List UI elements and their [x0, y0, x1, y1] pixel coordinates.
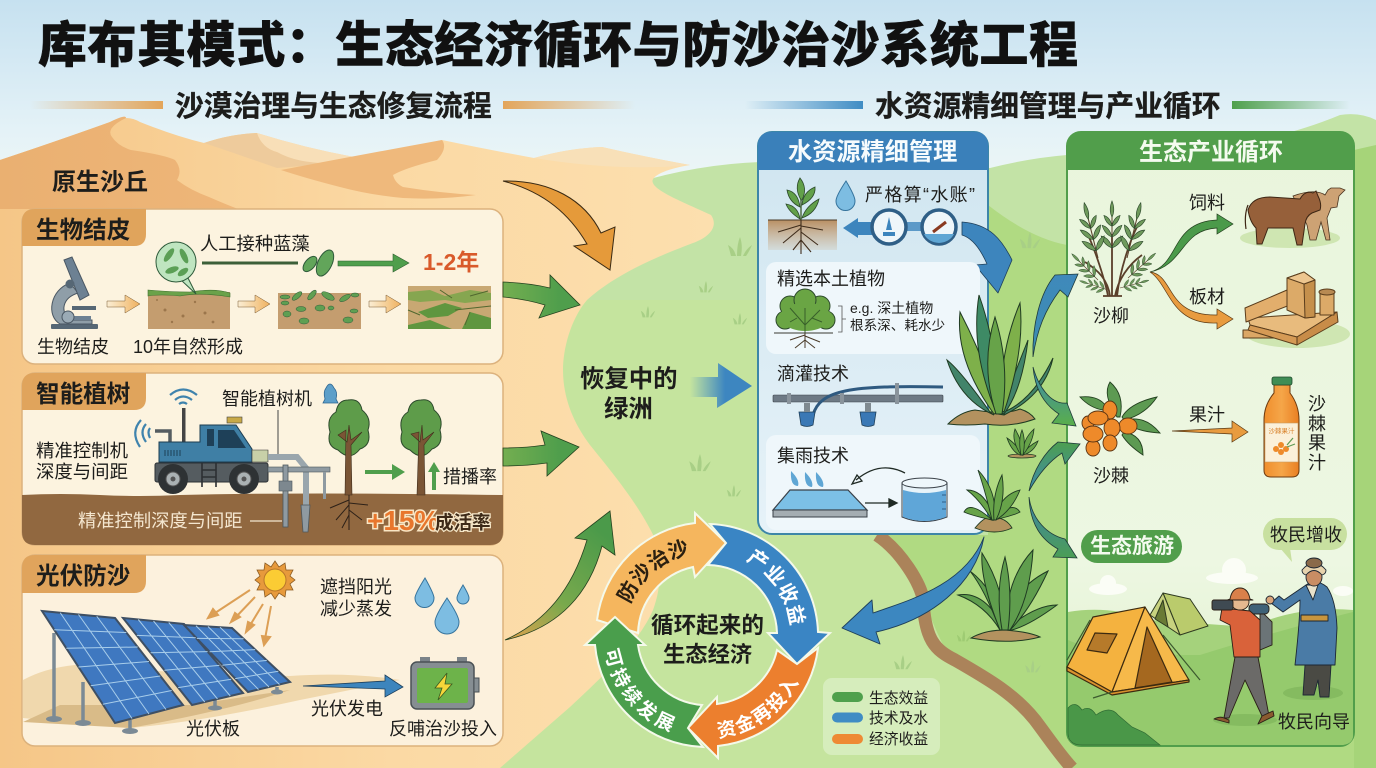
title: 库布其模式：生态经济循环与防沙治沙系统工程 [38, 19, 1078, 73]
icon: seedling with roots [768, 178, 837, 254]
label: 果汁 [1189, 405, 1225, 425]
label: 反哺治沙投入 [389, 719, 497, 739]
icon: sun [255, 561, 295, 599]
vertical label: sea buckthorn juice [1308, 394, 1326, 473]
label: 板材 [1189, 287, 1225, 307]
arrow: feed [1150, 214, 1233, 272]
header title: 水资源精细管理 [788, 139, 957, 166]
panel: smart tree planting [22, 373, 503, 545]
large tent [1067, 607, 1200, 698]
text: shade: 减少蒸发 [320, 599, 392, 619]
section heading: desert [30, 91, 635, 123]
segment: reinvestment [689, 646, 820, 760]
label: precise depth control: 精准控制深度与间距 [78, 510, 243, 531]
legend: ecological benefit: 生态效益 [869, 690, 928, 707]
arrow: plant to buckthorn [1033, 367, 1076, 426]
duration: 1-2年 [423, 249, 479, 275]
speech bubble: herder income [1263, 518, 1347, 562]
small tent [1150, 593, 1208, 635]
icon: water drop [836, 181, 855, 210]
center text: 生态经济 [663, 642, 752, 667]
panel header [758, 132, 988, 170]
arrow: solar power [303, 675, 403, 697]
background: meadow left of the road [750, 535, 1070, 768]
arrow: oasis to water management [690, 363, 752, 408]
segment: reinvestment: 资金再投入 [717, 682, 800, 740]
legend [823, 678, 940, 755]
label: 集雨技术 [777, 446, 849, 466]
text: precise control: 深度与间距 [36, 461, 128, 482]
illustration: cattle [1240, 188, 1345, 248]
header title: 生态产业循环 [1139, 139, 1283, 166]
icon: small blue device [323, 384, 338, 403]
label: 滴灌技术 [777, 364, 849, 384]
stat: survival rate: 成活率 [435, 512, 491, 533]
label: 沙柳 [1093, 306, 1129, 326]
legend: technology and water: 技术及水 [869, 710, 928, 727]
plant: salix [1066, 200, 1161, 296]
label: 10年自然形成 [133, 337, 243, 357]
stat: survival rate [367, 505, 491, 536]
center text: 循环起来的 [651, 613, 764, 638]
cycle diagram [582, 510, 832, 760]
arrow [369, 295, 401, 313]
background: brown road [877, 535, 1072, 768]
ground strip [22, 494, 503, 545]
callout: cyanobacteria magnifier [156, 242, 196, 294]
tree after [401, 400, 441, 495]
icon: shrub [774, 289, 835, 348]
plant: lower agave [958, 550, 1057, 641]
speech bubble: herder income: 牧民增收 [1270, 525, 1342, 545]
background: desert dunes [0, 117, 714, 768]
photographer [1212, 588, 1277, 726]
illustration: juice bottle: 沙棘果汁 [1268, 426, 1295, 435]
bush [1068, 704, 1160, 745]
arrow [107, 295, 140, 313]
arrow: plant to salix [1033, 274, 1078, 357]
label: planter machine: 智能植树机 [222, 389, 312, 409]
plant: small agave [1007, 429, 1038, 458]
panel: ecological industry cycle [1066, 132, 1354, 746]
tab heading: 生物结皮 [36, 217, 130, 244]
arrow: to large bottom [842, 537, 984, 644]
vertical label: sea buckthorn juice: 沙 [1308, 394, 1326, 414]
badge: eco tourism [1081, 530, 1182, 563]
arrow: juice [1172, 421, 1248, 442]
note text [850, 300, 945, 333]
background: faint grass tufts [641, 232, 1041, 672]
panel tab [22, 555, 146, 593]
label: 光伏板 [186, 719, 240, 739]
segment: sustainable development [582, 616, 705, 748]
icon: wifi signals [135, 390, 197, 447]
card: rainwater harvesting [766, 435, 980, 530]
text: shade [320, 577, 392, 619]
text: precise control [36, 440, 128, 482]
segment: industry income [706, 522, 832, 663]
clouds [1089, 558, 1353, 596]
section heading: water and industry: 水资源精细管理与产业循环 [875, 91, 1221, 123]
arrow: water to plants [962, 222, 1012, 293]
text: shade: 遮挡阳光 [320, 577, 392, 597]
soil sample: natural crust [148, 290, 230, 329]
label: 沙棘 [1093, 466, 1129, 486]
illustration: planting tractor [155, 408, 330, 532]
panel tab [22, 209, 146, 246]
arrow: boards [1150, 272, 1233, 329]
icon: water tank [902, 478, 947, 522]
label: recovering oasis [580, 366, 678, 423]
note text: e.g. 深土植物 [850, 300, 933, 316]
card: select native plants [766, 262, 980, 354]
label: recovering oasis: 恢复中的 [580, 366, 678, 393]
illustration: timber stack [1243, 272, 1350, 348]
label: 牧民向导 [1278, 712, 1350, 732]
arrow: agave to tourism [1029, 497, 1077, 558]
label: 生物结皮 [37, 337, 109, 357]
card: drip irrigation [773, 364, 943, 426]
icon: bacterium [300, 247, 337, 279]
plant: large agave [947, 295, 1053, 425]
arrow: crust to oasis [503, 275, 580, 318]
vertical label: sea buckthorn juice: 果 [1308, 433, 1326, 453]
plant: medium agave [964, 470, 1020, 532]
section heading: water and industry [745, 91, 1350, 123]
icon: battery [411, 657, 479, 709]
icon: rain drops [791, 471, 823, 487]
hills [1068, 609, 1353, 745]
arrow: up [428, 462, 440, 490]
panel: water resource management [758, 132, 988, 534]
center text [651, 613, 764, 667]
note text: 根系深、耗水少 [850, 318, 945, 333]
segment: sand control [596, 510, 725, 634]
text: precise control: 精准控制机 [36, 440, 128, 461]
vertical label: sea buckthorn juice: 棘 [1308, 414, 1326, 434]
icon: water drops [415, 578, 469, 634]
arrow: planting to oasis [503, 431, 579, 476]
herder [1266, 558, 1343, 700]
segment: sand control: 防沙治沙 [616, 539, 687, 604]
panel: solar sand control [22, 555, 503, 746]
tab heading: 光伏防沙 [36, 563, 130, 590]
arrow: growth [365, 464, 405, 480]
label: recovering oasis: 绿洲 [604, 396, 653, 423]
soil sample: inoculated [278, 289, 361, 329]
tab heading: 智能植树 [36, 381, 130, 408]
tourism scene [1067, 558, 1353, 745]
stat: survival rate: +15% [367, 505, 439, 536]
tree before [329, 400, 369, 530]
section heading: desert: 沙漠治理与生态修复流程 [175, 91, 492, 123]
arrow: dunes to oasis [503, 181, 615, 270]
pipe [773, 383, 943, 426]
soil sample: formed crust [408, 286, 491, 329]
solar panel array [42, 611, 290, 734]
arrow: green [338, 254, 409, 272]
arrow [238, 295, 270, 313]
label: water accounting: 严格算“水账” [865, 185, 975, 205]
vertical label: sea buckthorn juice: 汁 [1308, 453, 1326, 473]
segment: industry income: 产业收益 [746, 548, 806, 626]
segment: sustainable development: 可持续发展 [606, 648, 676, 732]
badge: eco tourism: 生态旅游 [1090, 534, 1174, 558]
arrow: tank to pool [852, 468, 905, 484]
icon: collecting pool [773, 490, 867, 517]
line [250, 520, 282, 522]
gauges [872, 210, 956, 244]
arrows: sun rays [208, 590, 271, 645]
background: distant green hills [500, 114, 1376, 768]
arrow: to seedling [843, 218, 872, 238]
panel: biological crust [22, 209, 503, 364]
arrow: pool to tank [865, 499, 897, 507]
label: native dune: 原生沙丘 [52, 169, 148, 196]
background: main meadow [400, 300, 760, 768]
panel header [1067, 132, 1354, 170]
background: meadow right of the road [880, 535, 1354, 768]
label: planting rate: 措播率 [443, 467, 497, 487]
background: sky [0, 0, 1376, 260]
bracket [838, 306, 846, 332]
panel tab [22, 373, 146, 410]
plant: sea buckthorn [1080, 382, 1160, 456]
card heading: 精选本土植物 [777, 269, 885, 289]
label: 饲料 [1189, 193, 1225, 213]
illustration: juice bottle [1264, 377, 1299, 477]
arrow: agave to buckthorn [1029, 442, 1080, 491]
small grass [957, 630, 971, 641]
legend: economic income: 经济收益 [869, 731, 928, 748]
arrow: solar to oasis [505, 511, 615, 640]
mound shadow [23, 690, 290, 728]
label: 光伏发电 [311, 699, 383, 719]
line [202, 262, 298, 264]
sand mound [23, 665, 400, 728]
icon: microscope [51, 257, 98, 329]
label: artificial inoculation: 人工接种蓝藻 [200, 233, 310, 254]
